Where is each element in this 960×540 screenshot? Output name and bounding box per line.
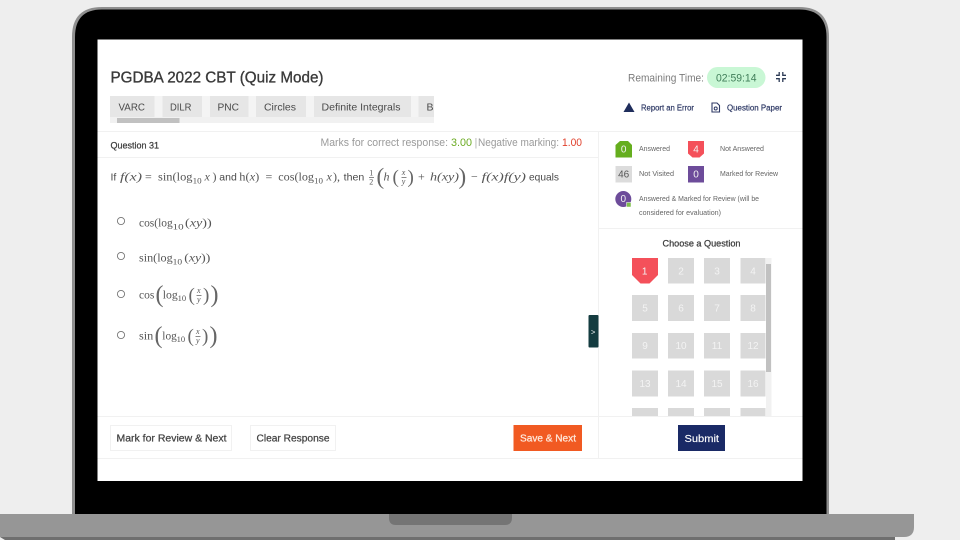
question text: x [401,168,406,177]
option 1: cos(log [139,216,173,230]
button: save and next: Save & Next [520,434,576,444]
button: clear response [250,426,336,450]
question text: equals [529,172,559,184]
option 4: y [195,336,200,345]
question text [110,164,559,189]
legend: answered: Answered [639,144,670,153]
questions 2 to 16: 13 [639,379,651,390]
question text: 10 [314,176,323,186]
legend: answered and marked [615,191,759,217]
laptop base [0,514,914,540]
question text: f(x) [120,170,142,184]
laptop lid [72,7,829,514]
marking scheme: 3.00 [451,137,472,149]
tab: VARC: VARC [118,102,145,114]
question number: Question 31 [110,140,159,152]
marking scheme: Negative marking: [478,137,559,149]
question text: ( [392,167,399,188]
button: clear response: Clear Response [256,434,330,444]
legend: answered and marked: Answered & Marked for Review (will be [639,194,759,203]
question text: 10 [193,176,202,186]
option 1: (xy)) [185,216,212,230]
divider lines [98,131,802,459]
tab: partially hidden: B [426,102,434,114]
icon: collapse fullscreen [776,72,786,82]
question text: x [326,170,332,184]
questions 2 to 16: 7 [714,304,720,314]
button: save and next [514,425,582,451]
question text: If [110,172,116,184]
question grid [632,258,772,416]
option 4: log [162,328,177,342]
tab: Definite Integrals: Definite Integrals [322,102,400,114]
timer pill: 02:59:14 [716,72,756,84]
questions 2 to 16: 2 [678,266,684,278]
option 3: x [196,286,201,295]
option 4: ) [210,323,218,349]
questions 2 to 16: 10 [675,341,687,352]
questions 2 to 16: 4 [750,266,756,278]
question text: f(x)f(y) [482,170,526,184]
tab: Definite Integrals [314,96,411,117]
legend: answered and marked: considered for evaluation) [639,208,721,217]
option 3: log [163,287,178,301]
question picker heading: Choose a Question [662,238,740,248]
option 2: 10 [173,257,182,267]
option 4: ( [154,323,162,349]
questions 2 to 16: 15 [711,379,723,390]
option 4: ) [202,326,208,347]
option 1 [117,216,212,232]
question text: + [418,170,425,184]
question text: − [471,170,478,184]
report an error [624,102,694,112]
option 1: 10 [173,222,184,232]
option 4 [117,323,218,349]
section tabs [110,96,434,123]
button: mark for review: Mark for Review & Next [116,434,227,444]
question text: x [204,170,210,184]
question text: h(xy) [430,170,459,184]
option 3 [117,282,218,308]
option 3: y [196,295,201,304]
question text: ) [212,170,216,184]
questions 2 to 16: 8 [750,304,756,314]
question text: h(x) [239,170,259,184]
legend: not visited: 46 [618,170,630,180]
legend [615,141,779,217]
legend: answered: 0 [621,144,627,156]
marking scheme [320,137,582,149]
question text: sin(log [158,170,192,184]
question text: then [344,172,364,184]
option 4: x [195,327,200,336]
question text: ) [408,167,414,188]
tab: partially hidden [418,96,434,117]
title: PGDBA 2022 CBT (Quiz Mode) [110,70,324,86]
legend: marked for review [688,166,779,182]
tab: DILR: DILR [170,102,192,114]
option 2 [117,251,210,267]
screen [98,40,802,481]
legend: marked for review: 0 [693,170,699,180]
option 3: 10 [178,294,186,303]
tabs scrollbar [110,117,434,123]
legend: not answered: Not Answered [720,144,764,153]
panel toggle [588,315,598,348]
marking scheme: | [474,137,477,149]
tab: PNC [210,96,248,117]
legend: not answered: 4 [693,144,699,156]
questions 2 to 16: 12 [747,341,759,352]
tab: Circles: Circles [264,102,296,114]
legend: marked for review: Marked for Review [720,169,779,178]
legend: answered and marked: 0 [621,194,627,205]
legend: not answered [688,141,764,158]
option 2: sin(log [139,251,173,265]
question text: h [384,170,390,184]
marking scheme: Marks for correct response: [320,137,448,149]
remaining time: Remaining Time: [628,72,704,84]
question text: = [266,170,272,184]
button: submit: Submit [684,433,719,445]
tab: Circles [256,96,306,117]
legend: not visited [616,166,674,182]
questions 2 to 16: 6 [678,304,684,314]
tab: PNC: PNC [218,102,239,114]
tab: DILR [162,96,202,117]
option 2: (xy)) [184,251,210,265]
panel toggle: > [591,328,596,336]
questions 2 to 16: 14 [675,379,687,390]
option 4: ( [188,326,194,347]
questions 2 to 16: 5 [642,304,648,314]
questions 2 to 16: 3 [714,266,720,278]
button: submit [678,425,725,451]
button: mark for review [110,426,232,450]
option 3: ) [210,282,218,308]
option 3: cos [139,287,155,301]
option 4: sin [139,328,153,342]
question text: = [145,170,152,184]
question text: ) [458,164,466,189]
option 4: 10 [177,335,185,344]
question text: ( [376,164,384,189]
question text: and [219,172,237,184]
option 3: ( [188,285,195,306]
question text: 1 [369,168,373,178]
option 3: ( [156,282,164,308]
questions 2 to 16: 16 [747,379,759,390]
option 3: ) [203,285,209,306]
questions 2 to 16: 11 [712,341,723,352]
tab: VARC [110,96,154,117]
question 1 [632,258,658,284]
grid scrollbar [766,258,772,416]
legend: not visited: Not Visited [639,169,674,178]
question text: 2 [369,178,373,186]
legend: answered [616,141,670,158]
questions 2 to 16 [632,258,766,416]
question paper: Question Paper [727,104,782,112]
marking scheme: 1.00 [562,137,582,149]
question text: cos(log [278,170,314,184]
questions 2 to 16: 9 [642,341,648,352]
timer pill [707,67,766,88]
question 1: 1 [642,266,648,278]
report an error: Report an Error [641,104,694,112]
question text: ), [333,170,340,184]
question text: y [401,177,406,186]
